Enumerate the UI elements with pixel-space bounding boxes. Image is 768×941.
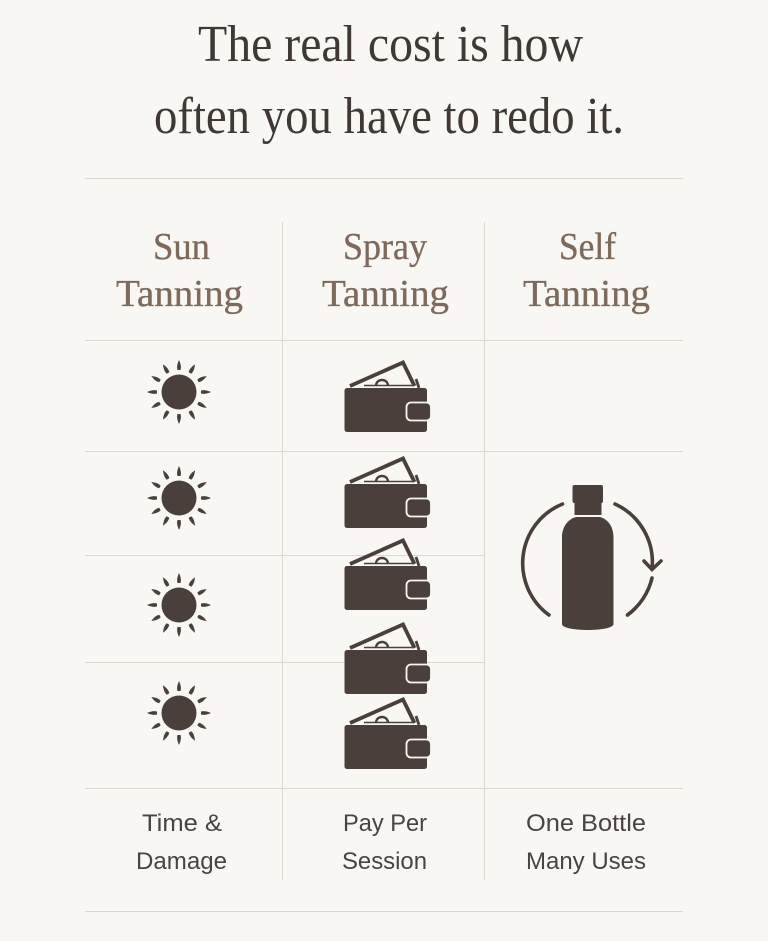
heading: self tanning (523, 226, 650, 315)
heading: spray tanning (322, 226, 449, 315)
column headers (116, 226, 650, 315)
caption: time and damage: Damage (136, 848, 227, 875)
heading: sun tanning (116, 226, 243, 315)
caption: one bottle many uses (526, 810, 646, 875)
caption: one bottle many uses: One Bottle (526, 810, 646, 837)
icon: bottle with refill cycle (523, 485, 661, 630)
caption: one bottle many uses: Many Uses (526, 848, 646, 875)
heading: sun tanning: Tanning (116, 273, 243, 315)
caption: pay per session: Pay Per (343, 810, 427, 837)
icon: sun 3 (147, 573, 211, 637)
cycle arcs (523, 504, 661, 615)
heading: self tanning: Tanning (523, 273, 650, 315)
bottom captions (136, 810, 646, 875)
title: The real cost is how (198, 16, 583, 73)
caption: pay per session (342, 810, 427, 875)
icon: wallet 1 (344, 362, 431, 432)
icon: sun 2 (147, 466, 211, 530)
heading: spray tanning: Spray (343, 226, 427, 268)
heading: spray tanning: Tanning (322, 273, 449, 315)
icon: sun 1 (147, 360, 211, 424)
icon: sun 4 (147, 681, 211, 745)
icon: wallet 4 (344, 624, 431, 694)
bottle (562, 485, 614, 630)
sun icons column (147, 360, 211, 745)
caption: time and damage: Time & (142, 810, 222, 837)
caption: time and damage (136, 810, 227, 875)
icon: wallet 3 (344, 540, 431, 610)
icon: wallet 5 (344, 700, 431, 769)
title (154, 16, 624, 145)
title: often you have to redo it. (154, 88, 624, 145)
heading: sun tanning: Sun (153, 226, 210, 268)
wallet icons column (344, 362, 431, 769)
heading: self tanning: Self (559, 226, 616, 268)
caption: pay per session: Session (342, 848, 427, 875)
icon: wallet 2 (344, 458, 431, 528)
